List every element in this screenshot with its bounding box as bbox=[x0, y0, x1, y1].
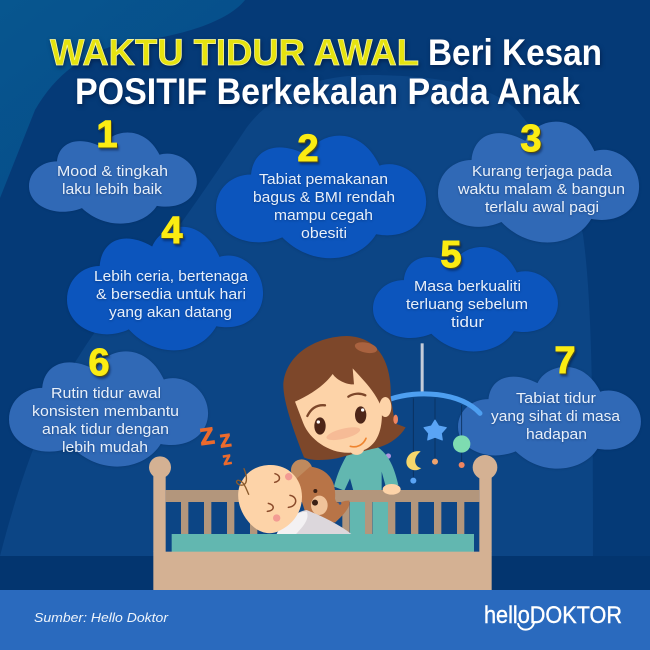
cloud 5: quality time bbox=[373, 234, 558, 352]
cloud 1: mood: laku lebih baik bbox=[62, 182, 163, 198]
cloud 1: mood: 1 bbox=[96, 114, 118, 156]
cloud 5: quality time: Masa berkualiti bbox=[414, 279, 521, 295]
cloud 6: consistent routine: Rutin tidur awal bbox=[51, 386, 161, 402]
cloud 5: quality time: tidur bbox=[451, 315, 484, 331]
cloud 2: eating habits: mampu cegah bbox=[274, 208, 373, 224]
cloud 7: healthy future habits: 7 bbox=[554, 340, 576, 382]
cloud 2: eating habits: Tabiat pemakanan bbox=[259, 172, 388, 188]
sleep letters Z: Z bbox=[198, 422, 216, 450]
cloud 4: energy: 4 bbox=[161, 210, 183, 252]
cloud 6: consistent routine bbox=[9, 342, 208, 467]
sleeping baby bbox=[237, 465, 351, 534]
sleep letters Z: Z bbox=[219, 430, 232, 451]
title bbox=[50, 31, 602, 112]
crib mobile bbox=[386, 343, 480, 484]
cloud 6: consistent routine: lebih mudah bbox=[62, 440, 148, 456]
title: Beri Kesan bbox=[428, 31, 602, 73]
sleep letters Z bbox=[198, 422, 232, 468]
cloud 1: mood bbox=[29, 114, 197, 224]
cloud 7: healthy future habits bbox=[458, 340, 641, 469]
title: WAKTU TIDUR AWAL bbox=[50, 31, 419, 73]
cloud 5: quality time: terluang sebelum bbox=[406, 297, 528, 313]
cloud 5: quality time: 5 bbox=[440, 234, 462, 276]
cloud 2: eating habits: bagus & BMI rendah bbox=[253, 190, 395, 206]
cloud 3: alertness: waktu malam & bangun bbox=[457, 182, 625, 198]
sleep letters Z: Z bbox=[222, 452, 232, 468]
cloud 4: energy bbox=[67, 210, 263, 350]
cloud 3: alertness: Kurang terjaga pada bbox=[472, 164, 613, 180]
mattress bbox=[172, 534, 474, 552]
logo: helloDOKTOR: helloDOKTOR bbox=[484, 602, 622, 629]
cloud 4: energy: & bersedia untuk hari bbox=[96, 287, 246, 303]
cloud 2: eating habits: 2 bbox=[297, 128, 319, 170]
cloud 3: alertness bbox=[438, 118, 639, 243]
cloud 4: energy: Lebih ceria, bertenaga bbox=[94, 269, 249, 285]
title: POSITIF Berkekalan Pada Anak bbox=[75, 70, 580, 112]
footer bar bbox=[0, 590, 650, 650]
cloud 7: healthy future habits: hadapan bbox=[526, 427, 587, 443]
cloud 4: energy: yang akan datang bbox=[109, 305, 232, 321]
mother's hand bbox=[383, 484, 401, 495]
cloud 2: eating habits: obesiti bbox=[301, 226, 347, 242]
mother bbox=[283, 336, 406, 534]
illustration: mother, baby and crib bbox=[149, 336, 497, 590]
cloud 7: healthy future habits: yang sihat di masa bbox=[491, 409, 621, 425]
cloud 3: alertness: terlalu awal pagi bbox=[485, 200, 599, 216]
cloud 6: consistent routine: konsisten membantu bbox=[32, 404, 179, 420]
crib rail and slats bbox=[166, 490, 479, 534]
cloud 6: consistent routine: 6 bbox=[88, 342, 110, 384]
teddy bear bbox=[291, 459, 350, 523]
cloud 1: mood: Mood & tingkah bbox=[57, 164, 168, 180]
cloud 7: healthy future habits: Tabiat tidur bbox=[516, 391, 596, 407]
crib frame bbox=[149, 455, 497, 590]
source text: Sumber: Hello Doktor bbox=[34, 610, 169, 625]
cloud 2: eating habits bbox=[216, 128, 426, 258]
cloud 6: consistent routine: anak tidur dengan bbox=[42, 422, 169, 438]
cloud 3: alertness: 3 bbox=[520, 118, 542, 160]
